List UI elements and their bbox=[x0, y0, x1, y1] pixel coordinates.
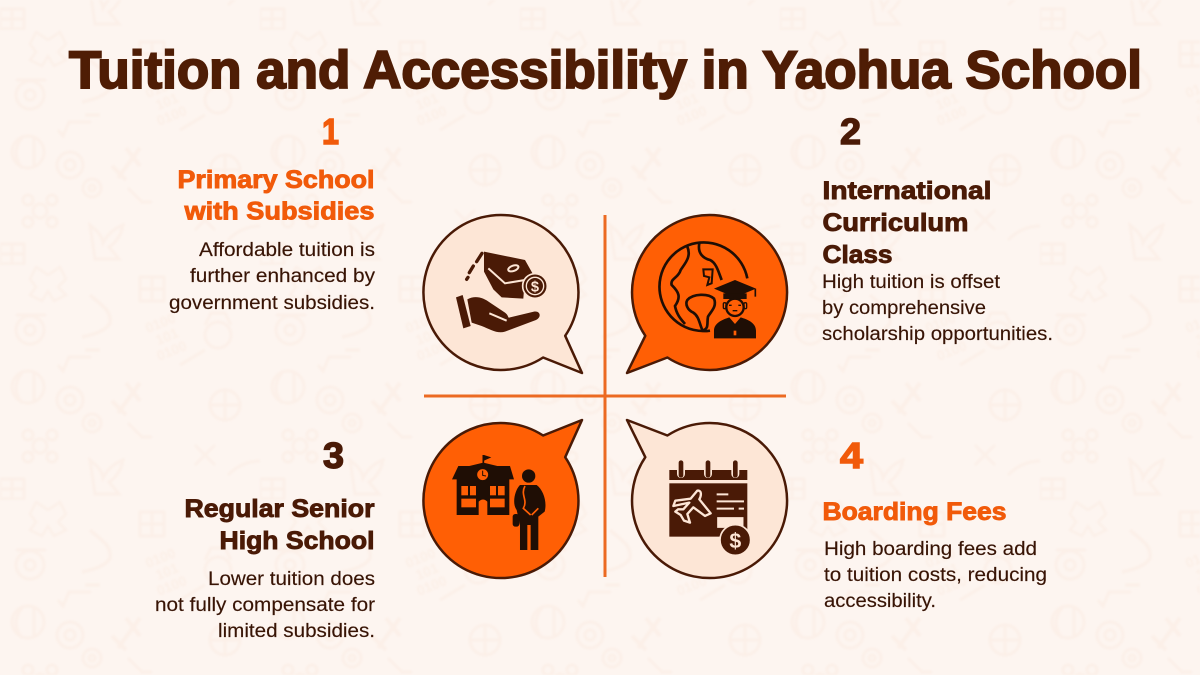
heading 2: Class bbox=[822, 241, 892, 269]
body 1 bbox=[169, 240, 376, 314]
heading 4: Boarding Fees bbox=[822, 498, 1006, 526]
panel 2: international curriculum bbox=[627, 111, 1053, 373]
body 4: accessibility. bbox=[824, 591, 936, 612]
number 2: 2 bbox=[840, 111, 861, 152]
bubble 3 with school and student icon bbox=[423, 420, 582, 578]
body 2: scholarship opportunities. bbox=[822, 324, 1053, 345]
heading 3: Regular Senior bbox=[184, 495, 375, 523]
body 2: High tuition is offset bbox=[822, 272, 1001, 293]
heading 2: International bbox=[822, 177, 992, 205]
icon: calendar with plane and dollar bbox=[669, 463, 751, 555]
body 4 bbox=[824, 539, 1047, 612]
number 1: 1 bbox=[322, 111, 339, 152]
panel 3: regular senior high school bbox=[155, 420, 582, 642]
body 2: by comprehensive bbox=[822, 298, 986, 319]
body 4: to tuition costs, reducing bbox=[824, 565, 1047, 586]
icon: cap and coin over hand bbox=[456, 252, 547, 332]
panel 1: primary school bbox=[169, 111, 582, 373]
body 3: Lower tuition does bbox=[208, 569, 375, 590]
bubble 2 with globe and graduate icon bbox=[627, 215, 787, 373]
body 2 bbox=[822, 272, 1053, 345]
heading 3: High School bbox=[220, 527, 374, 555]
number 3: 3 bbox=[323, 435, 344, 476]
body 1: government subsidies. bbox=[169, 293, 375, 314]
heading 2: Curriculum bbox=[822, 209, 968, 237]
icon: school and student bbox=[452, 455, 545, 550]
body 1: Affordable tuition is bbox=[199, 240, 375, 261]
icon: cap and coin over hand: $ bbox=[531, 279, 539, 295]
body 3: not fully compensate for bbox=[155, 595, 376, 616]
heading 1 bbox=[178, 166, 374, 226]
number 4: 4 bbox=[840, 435, 863, 476]
body 1: further enhanced by bbox=[190, 266, 376, 287]
body 3 bbox=[155, 569, 376, 642]
heading 1: Primary School bbox=[178, 166, 374, 194]
icon: calendar with plane and dollar: $ bbox=[729, 529, 741, 553]
heading 1: with Subsidies bbox=[183, 198, 374, 226]
body 3: limited subsidies. bbox=[218, 621, 375, 642]
cross divider bbox=[424, 215, 786, 577]
icon: globe and graduate bbox=[659, 242, 756, 338]
bubble 1 with graduation cap in hand icon bbox=[423, 215, 582, 373]
body 4: High boarding fees add bbox=[824, 539, 1037, 560]
heading 3 bbox=[184, 495, 375, 555]
panel 4: boarding fees bbox=[627, 420, 1047, 612]
heading 2 bbox=[822, 177, 992, 269]
bubble 4 with calendar icon bbox=[627, 420, 787, 578]
title: Tuition and Accessibility in Yaohua School bbox=[69, 41, 1142, 100]
